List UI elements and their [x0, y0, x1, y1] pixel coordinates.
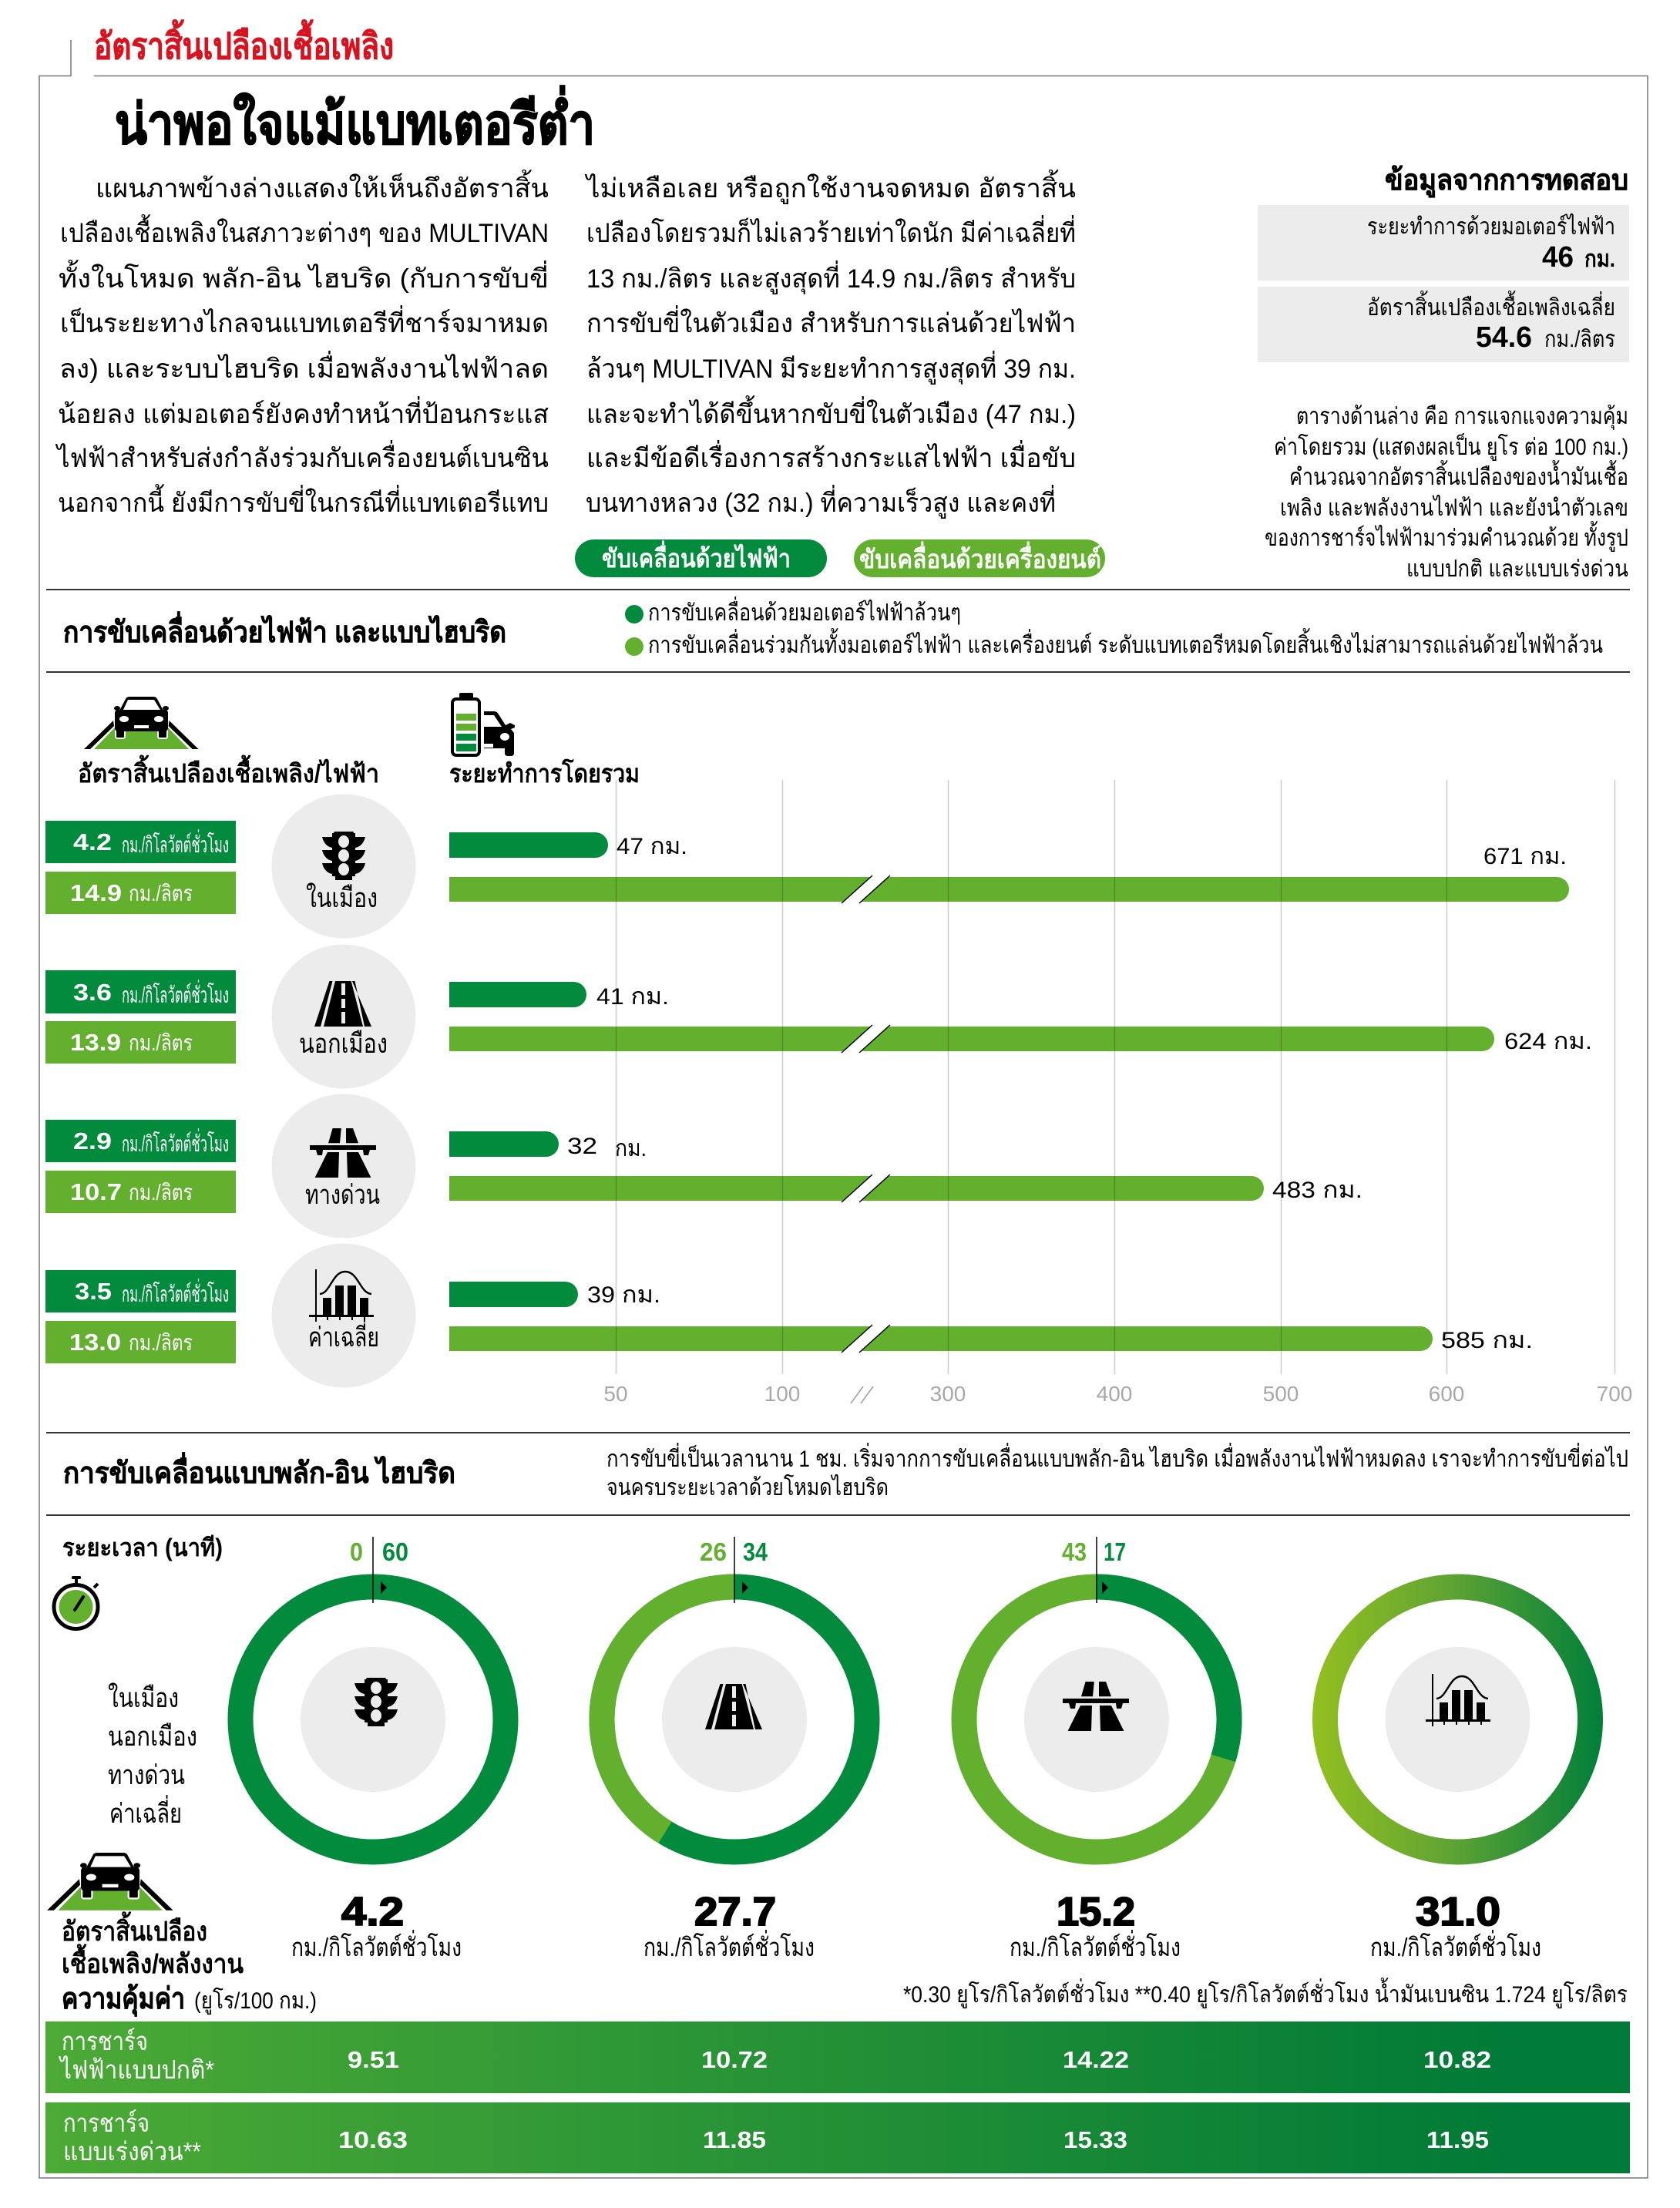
fuel consumption value [45, 1021, 236, 1064]
electric consumption value [45, 1120, 236, 1162]
consumption value: city: กม./กิโลวัตต์ชั่วโมง [291, 1930, 462, 1961]
electric consumption value [45, 970, 236, 1013]
bars: expressway range: 483 กม. [1272, 1178, 1362, 1203]
consumption row heading: เชื้อเพลิง/พลังงาน [62, 1944, 244, 1979]
axis labels: 600 [1429, 1382, 1464, 1406]
body text left column [55, 170, 549, 518]
pill: electric drive [575, 539, 827, 577]
fuel consumption value [45, 1171, 236, 1213]
bars: expressway range: กม. [615, 1136, 647, 1161]
electric range box [1258, 205, 1629, 281]
electric consumption value [45, 1270, 236, 1312]
table row: fast charging [45, 2102, 1630, 2173]
panel: test data [1258, 164, 1629, 582]
route labels [108, 1682, 197, 1829]
value-for-money heading [62, 1983, 317, 2017]
bars: city range: 47 กม. [617, 834, 687, 859]
fuel consumption value: 13.9 [70, 1029, 121, 1056]
donut: outside city: 34 [743, 1538, 768, 1566]
donut: expressway: 43 [1062, 1538, 1087, 1566]
axis labels: 400 [1097, 1382, 1132, 1406]
cost table explanation: เพลิง และพลังงานไฟฟ้า และยังนำตัวเลข [1280, 494, 1628, 521]
circle: city [271, 794, 416, 939]
axis labels: 300 [930, 1382, 966, 1406]
circle: expressway: ทางด่วน [305, 1180, 380, 1210]
route labels: ทางด่วน [108, 1760, 185, 1790]
circle: city: ในเมือง [306, 882, 378, 913]
body text right column: เปลืองโดยรวมก็ไม่เลวร้ายเท่าใดนัก มีค่าเฉลี่ยที่ [586, 215, 1076, 248]
panel: row expressway [45, 1094, 1362, 1238]
bars: outside city range: 624 กม. [1504, 1029, 1592, 1054]
electric range box: 46 [1542, 241, 1574, 274]
value-for-money heading: (ยูโร/100 กม.) [194, 1987, 317, 2015]
body text left column: เปลืองเชื้อเพลิงในสภาวะต่างๆ ของ MULTIVAN [60, 214, 549, 248]
consumption value: city: 4.2 [341, 1890, 404, 1934]
table row: normal charging [45, 2021, 1630, 2093]
body text right column: และจะทำได้ดีขึ้นหากขับขี่ในตัวเมือง (47 กม.) [586, 395, 1076, 429]
table row: fast charging: 11.95 [1426, 2126, 1489, 2153]
bars: average range: 585 กม. [1441, 1328, 1533, 1353]
average consumption box [1258, 287, 1629, 362]
donut: expressway: 17 [1104, 1538, 1126, 1566]
donut: outside city: 26 [700, 1538, 727, 1566]
body text left column: นอกจากนี้ ยังมีการขับขี่ในกรณีที่แบทเตอรีแทบ [58, 484, 549, 518]
bars: city range [449, 832, 1569, 903]
panel: row city [45, 794, 1569, 939]
section heading: plug-in hybrid driving: การขับเคลื่อนแบบพลัก-อิน ไฮบริด [63, 1452, 455, 1490]
consumption value: city [291, 1890, 462, 1961]
body text left column: เป็นระยะทางไกลจนแบทเตอรีที่ชาร์จมาหมด [60, 305, 549, 338]
fuel consumption value [45, 1321, 236, 1363]
electric consumption value: กม./กิโลวัตต์ชั่วโมง [122, 829, 229, 858]
icon: car on road [47, 1853, 173, 1911]
electric consumption value: 4.2 [73, 828, 112, 855]
fuel consumption value: กม./ลิตร [129, 1181, 193, 1205]
cost table explanation [1265, 404, 1628, 582]
legend [625, 597, 1603, 658]
consumption value: average: 31.0 [1416, 1890, 1500, 1934]
table row: normal charging: 10.72 [701, 2046, 768, 2073]
body text left column: ทั้งในโหมด พลัก-อิน ไฮบริด (กับการขับขี่ [59, 260, 549, 294]
route labels: ค่าเฉลี่ย [109, 1795, 182, 1829]
panel: row average [45, 1244, 1533, 1387]
duration heading: ระยะเวลา (นาที) [62, 1534, 223, 1561]
electric consumption value: 3.6 [73, 979, 112, 1006]
kicker heading: อัตราสิ้นเปลืองเชื้อเพลิง [94, 19, 394, 66]
fuel consumption value: กม./ลิตร [129, 882, 193, 906]
body text left column: แผนภาพข้างล่างแสดงให้เห็นถึงอัตราสิ้น [96, 170, 549, 203]
average consumption box: อัตราสิ้นเปลืองเชื้อเพลิงเฉลี่ย [1367, 291, 1615, 321]
fuel consumption value: 13.0 [69, 1329, 121, 1356]
consumption value: average [1370, 1890, 1541, 1961]
table row: fast charging: แบบเร่งด่วน** [63, 2137, 201, 2166]
circle: average: ค่าเฉลี่ย [308, 1319, 379, 1353]
table row: normal charging: การชาร์จ [62, 2027, 148, 2055]
table row: normal charging: ไฟฟ้าแบบปกติ* [58, 2055, 214, 2084]
panel: row outside city [45, 945, 1592, 1088]
body text left column: ไฟฟ้าสำหรับส่งกำลังร่วมกับเครื่องยนต์เบนซิน [55, 440, 549, 473]
fuel consumption value [45, 872, 236, 914]
electric consumption value: กม./กิโลวัตต์ชั่วโมง [122, 1279, 229, 1307]
fuel consumption value: 10.7 [70, 1178, 122, 1205]
average consumption box: 54.6 [1476, 321, 1532, 354]
test data heading: ข้อมูลจากการทดสอบ [1385, 164, 1628, 198]
donut: city: 0 [350, 1538, 363, 1566]
bars: city range: 671 กม. [1483, 844, 1567, 869]
table row: normal charging: 9.51 [348, 2046, 399, 2073]
pill: engine drive [854, 539, 1105, 577]
average consumption box: กม./ลิตร [1544, 327, 1615, 352]
fuel consumption value: 14.9 [70, 879, 122, 906]
electric range box: ระยะทำการด้วยมอเตอร์ไฟฟ้า [1367, 213, 1615, 240]
donut: city [240, 1537, 506, 1852]
legend: การขับเคลื่อนด้วยมอเตอร์ไฟฟ้าล้วนๆ [648, 597, 961, 626]
donut: average [1326, 1587, 1591, 1852]
bars: average range: 39 กม. [587, 1282, 660, 1308]
section note [606, 1443, 1628, 1501]
circle: average [271, 1244, 416, 1387]
fuel consumption value: กม./ลิตร [129, 1031, 193, 1056]
table row: fast charging: 15.33 [1063, 2126, 1127, 2153]
icon: car on road [84, 697, 199, 749]
consumption row heading [62, 1911, 244, 1979]
table row: fast charging: 10.63 [338, 2126, 408, 2153]
table row: normal charging: 14.22 [1063, 2046, 1129, 2073]
electric range box: กม. [1584, 247, 1615, 272]
consumption value: expressway [1010, 1890, 1181, 1961]
electric consumption value: กม./กิโลวัตต์ชั่วโมง [122, 980, 229, 1008]
body text right column: ล้วนๆ MULTIVAN มีระยะทำการสูงสุดที่ 39 กม. [586, 351, 1076, 385]
consumption value: outside city: กม./กิโลวัตต์ชั่วโมง [643, 1930, 815, 1961]
column heading: total range: ระยะทำการโดยรวม [449, 758, 640, 788]
table row: normal charging: 10.82 [1423, 2046, 1491, 2073]
table row: fast charging: การชาร์จ [63, 2109, 150, 2137]
axis labels: 700 [1597, 1382, 1632, 1406]
electric consumption value: กม./กิโลวัตต์ชั่วโมง [122, 1128, 229, 1157]
consumption value: outside city: 27.7 [694, 1890, 776, 1934]
bars: expressway range [449, 1131, 1362, 1203]
body text right column: ไม่เหลือเลย หรือถูกใช้งานจดหมด อัตราสิ้น [584, 170, 1076, 204]
body text right column: และมีข้อดีเรื่องการสร้างกระแสไฟฟ้า เมื่อขับ [586, 440, 1076, 473]
body text right column [584, 170, 1076, 519]
table row: fast charging: 11.85 [703, 2126, 766, 2153]
axis labels: 500 [1263, 1382, 1299, 1406]
body text left column: น้อยลง แต่มอเตอร์ยังคงทำหน้าที่ป้อนกระแส [58, 396, 549, 429]
body text right column: 13 กม./ลิตร และสูงสุดที่ 14.9 กม./ลิตร สำหรับ [586, 260, 1076, 294]
bars: average range [449, 1282, 1533, 1353]
route labels: ในเมือง [108, 1682, 179, 1713]
column heading: consumption: อัตราสิ้นเปลืองเชื้อเพลิง/ไฟฟ้า [78, 754, 379, 788]
consumption value: expressway: กม./กิโลวัตต์ชั่วโมง [1010, 1930, 1181, 1961]
body text right column: บนทางหลวง (32 กม.) ที่ความเร็วสูง และคงที่ [586, 485, 1056, 519]
pill: engine drive: ขับเคลื่อนด้วยเครื่องยนต์ [859, 541, 1101, 573]
consumption value: average: กม./กิโลวัตต์ชั่วโมง [1370, 1930, 1541, 1961]
bars: outside city range: 41 กม. [596, 984, 669, 1010]
pill: electric drive: ขับเคลื่อนด้วยไฟฟ้า [602, 540, 791, 573]
section heading: electric and hybrid driving: การขับเคลื่อนด้วยไฟฟ้า และแบบไฮบริด [63, 611, 506, 649]
consumption row heading: อัตราสิ้นเปลือง [62, 1911, 207, 1947]
value-for-money heading: ความคุ้มค่า [62, 1983, 185, 2017]
circle: outside city: นอกเมือง [299, 1029, 388, 1059]
donut: expressway [964, 1537, 1229, 1852]
electric consumption value [45, 821, 236, 863]
donut: outside city [602, 1537, 867, 1852]
axis labels: 100 [764, 1382, 800, 1406]
electric consumption value: 2.9 [73, 1128, 112, 1154]
route labels: นอกเมือง [108, 1722, 197, 1752]
icon: battery and car [452, 693, 515, 756]
body text left column: ลง) และระบบไฮบริด เมื่อพลังงานไฟฟ้าลด [59, 351, 549, 384]
icon: stopwatch [54, 1576, 98, 1629]
fuel consumption value: กม./ลิตร [129, 1331, 193, 1356]
electric consumption value: 3.5 [75, 1278, 112, 1305]
bars: outside city range [449, 982, 1592, 1054]
circle: expressway [271, 1094, 416, 1238]
axis labels [603, 1382, 1632, 1406]
section note: จนครบระยะเวลาด้วยโหมดไฮบริด [606, 1474, 889, 1501]
axis labels: 50 [603, 1382, 628, 1406]
body text right column: การขับขี่ในตัวเมือง สำหรับการแล่นด้วยไฟฟ้า [586, 305, 1076, 338]
bars: expressway range: 32 [567, 1134, 597, 1159]
consumption value: outside city [643, 1890, 815, 1961]
donut: city: 60 [382, 1538, 408, 1566]
circle: outside city [271, 945, 416, 1088]
main title: น่าพอใจแม้แบทเตอรีต่ำ [115, 85, 595, 156]
consumption value: expressway: 15.2 [1057, 1890, 1135, 1934]
cost table explanation: แบบปกติ และแบบเร่งด่วน [1406, 556, 1628, 582]
